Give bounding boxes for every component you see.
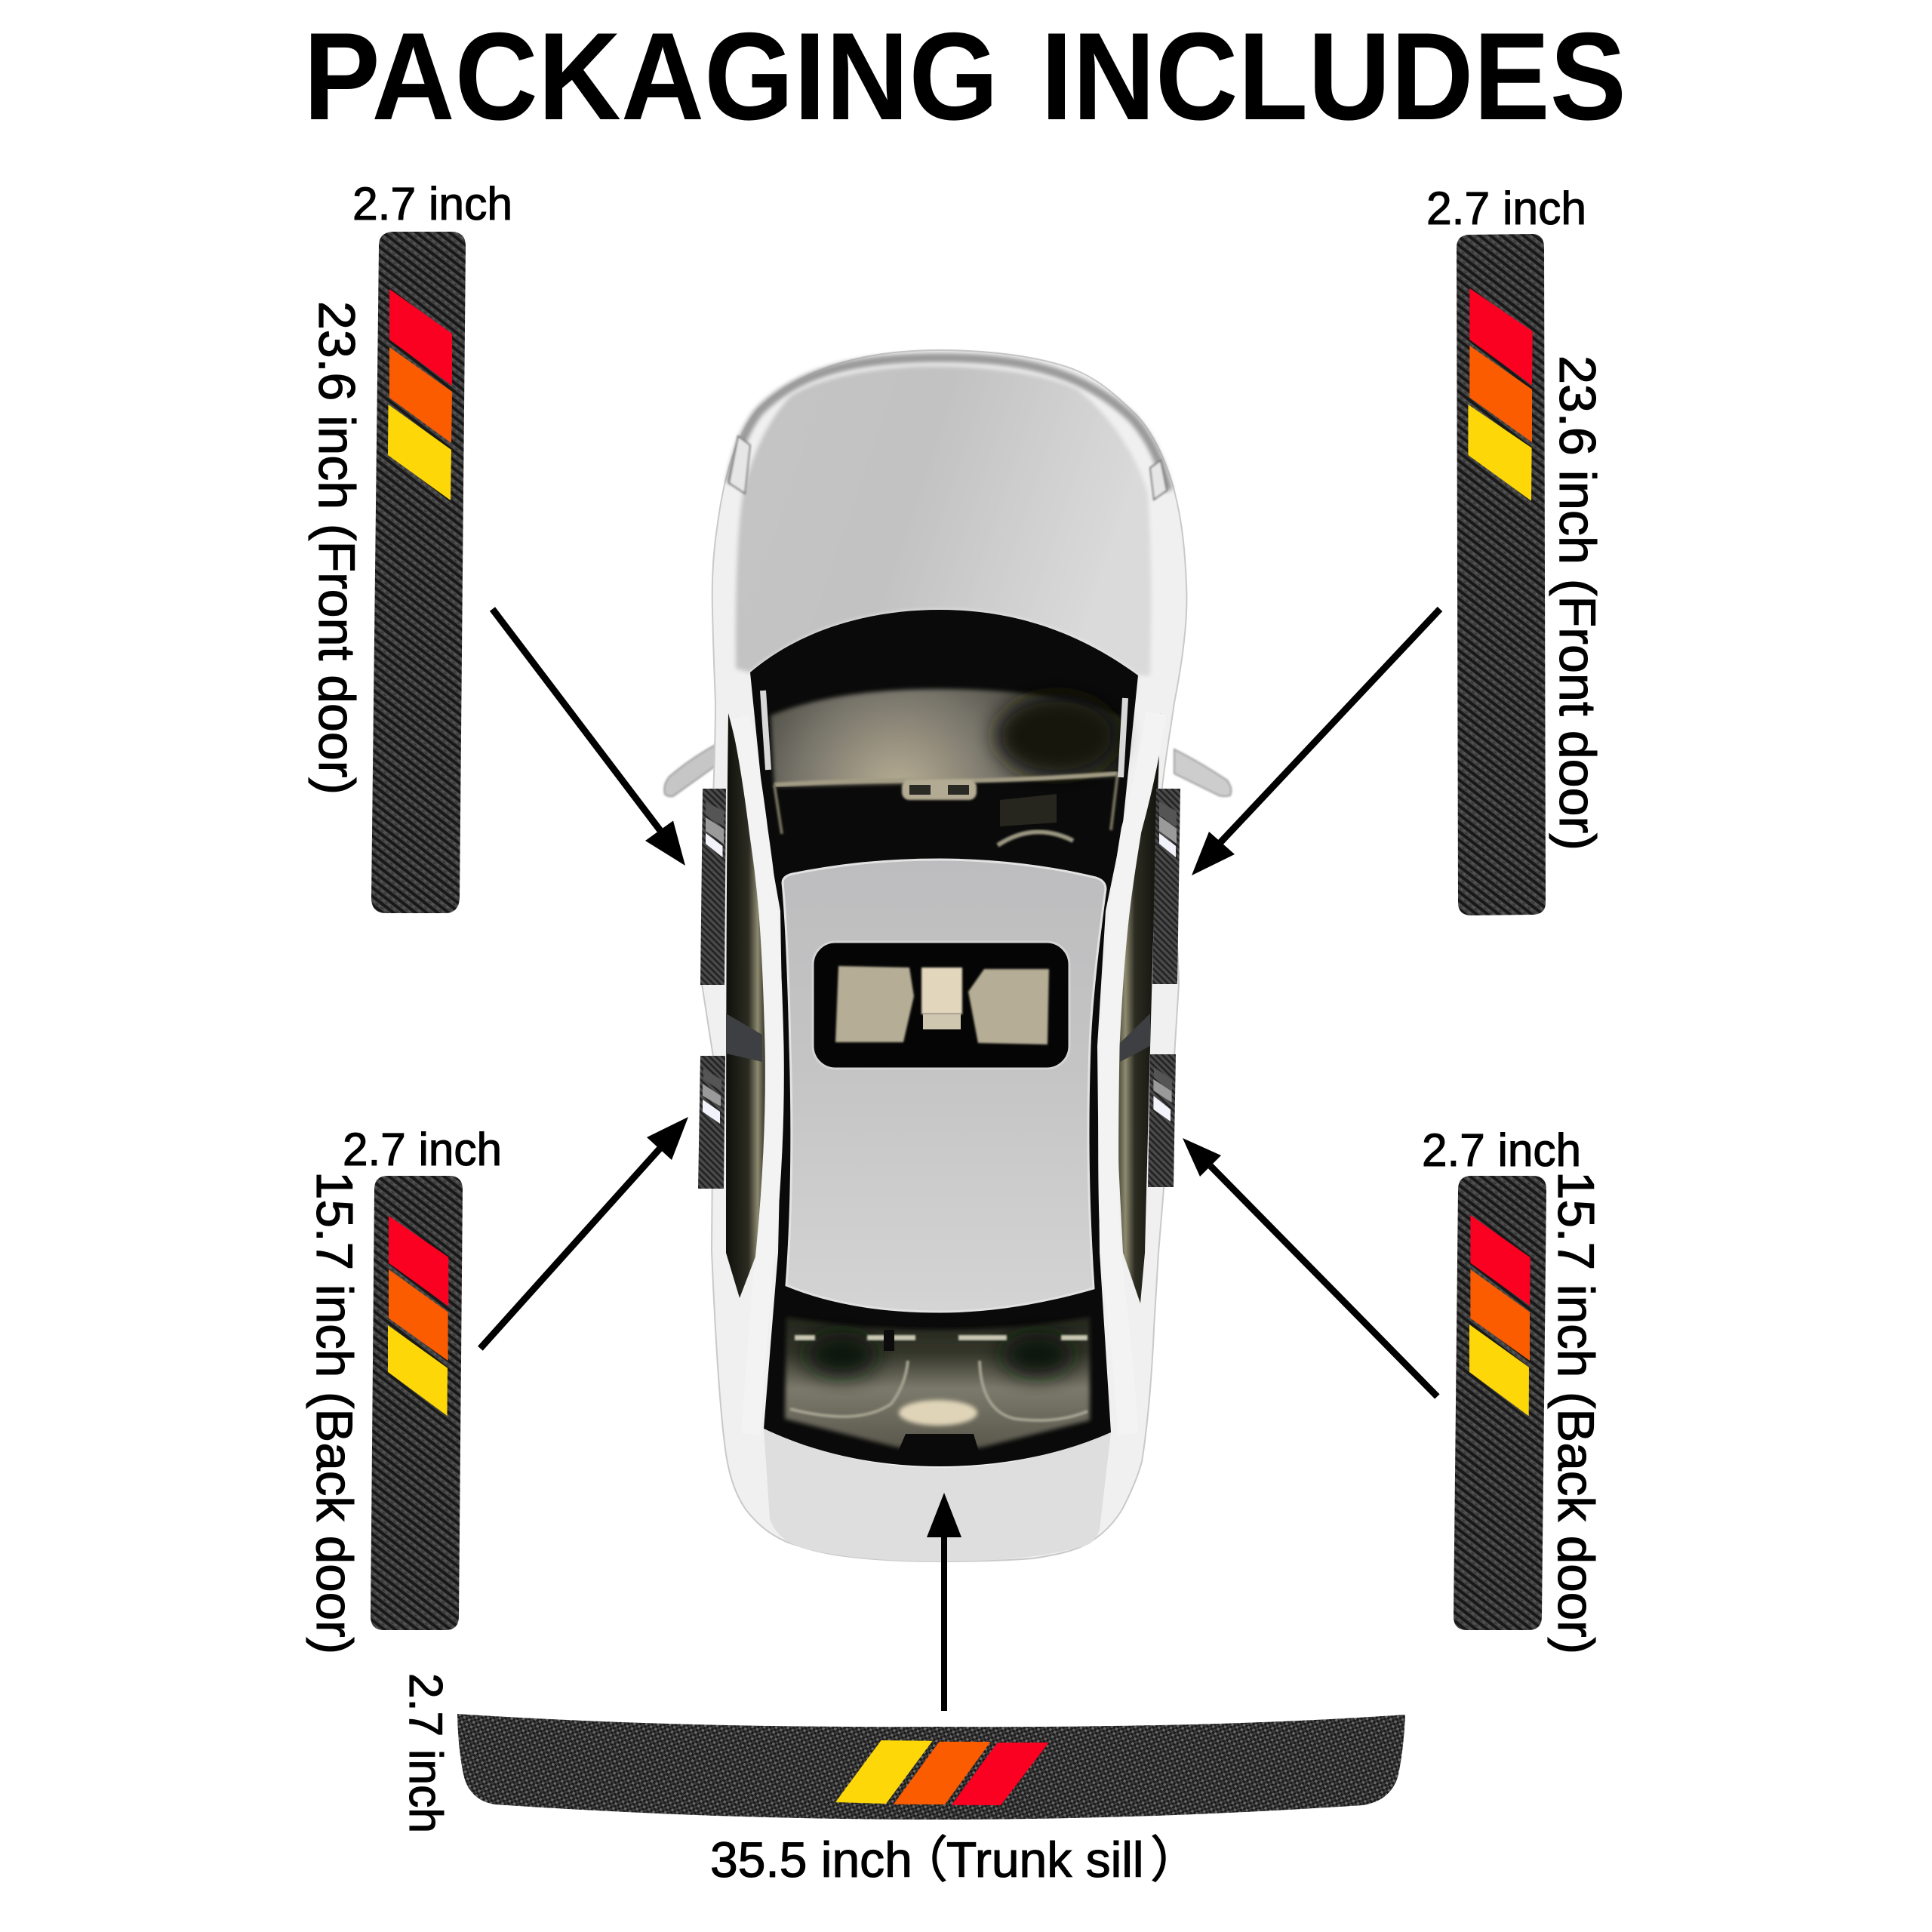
windshield interior — [771, 689, 1122, 786]
panel: trunk sill strip — [457, 1714, 1405, 1820]
title: PACKAGING — [303, 7, 998, 146]
B pillars — [726, 1014, 1150, 1062]
black glass frame — [750, 610, 1138, 1466]
arrow: left back — [480, 1117, 688, 1349]
roof — [783, 860, 1106, 1312]
arrow: left front — [492, 609, 685, 866]
label: trunk sill length: （ — [898, 1832, 948, 1887]
rear window interior — [785, 1317, 1090, 1457]
label: trunk sill length: Trunk sill — [946, 1832, 1144, 1887]
windshield shadow — [995, 694, 1118, 777]
arrow: right back — [1183, 1138, 1437, 1396]
car body — [702, 350, 1186, 1561]
label: left back width: 2.7 inch — [343, 1124, 502, 1175]
label: left front length: 23.6 inch (Front door) — [308, 301, 365, 795]
left pillar and side rail — [740, 717, 774, 1434]
panel: right front door strip — [1457, 234, 1546, 915]
trunk lid — [764, 1429, 1111, 1561]
left side windows — [726, 713, 767, 1298]
car illustration — [664, 350, 1231, 1561]
label: left front width: 2.7 inch — [352, 178, 512, 229]
label: left back length: 15.7 inch (Back door) — [306, 1171, 363, 1654]
panel: left front door strip — [371, 232, 466, 913]
hood rim — [731, 358, 1168, 491]
mirror: left — [664, 745, 724, 796]
label: right back width: 2.7 inch — [1422, 1124, 1581, 1176]
right side windows — [1114, 713, 1161, 1303]
arrow: right front — [1192, 609, 1440, 875]
panel: left back door strip — [371, 1176, 463, 1630]
windshield side trim — [763, 691, 1125, 777]
mirror: right — [1174, 749, 1231, 796]
door strip: right front — [1152, 789, 1180, 984]
hood — [736, 366, 1151, 675]
label: trunk sill length: 35.5 inch — [710, 1832, 912, 1887]
door strip: left front — [700, 789, 726, 985]
sunroof — [813, 942, 1069, 1069]
label: right front length: 23.6 inch (Front door) — [1549, 355, 1606, 851]
dashboard — [774, 774, 1118, 845]
door strip: right back — [1148, 1054, 1176, 1187]
label: right back length: 15.7 inch (Back door) — [1547, 1171, 1604, 1654]
label: trunk sill length: ） — [1150, 1832, 1200, 1887]
arrow: trunk — [927, 1493, 961, 1711]
title — [303, 7, 1626, 146]
right pillar and side rail — [1109, 713, 1156, 1434]
label: trunk sill height: 2.7 inch — [399, 1673, 451, 1833]
panel: right back door strip — [1454, 1176, 1546, 1630]
label: right front width: 2.7 inch — [1426, 183, 1586, 234]
title: INCLUDES — [1041, 7, 1626, 146]
door strip: left back — [698, 1056, 725, 1189]
hood vents — [729, 436, 1167, 500]
